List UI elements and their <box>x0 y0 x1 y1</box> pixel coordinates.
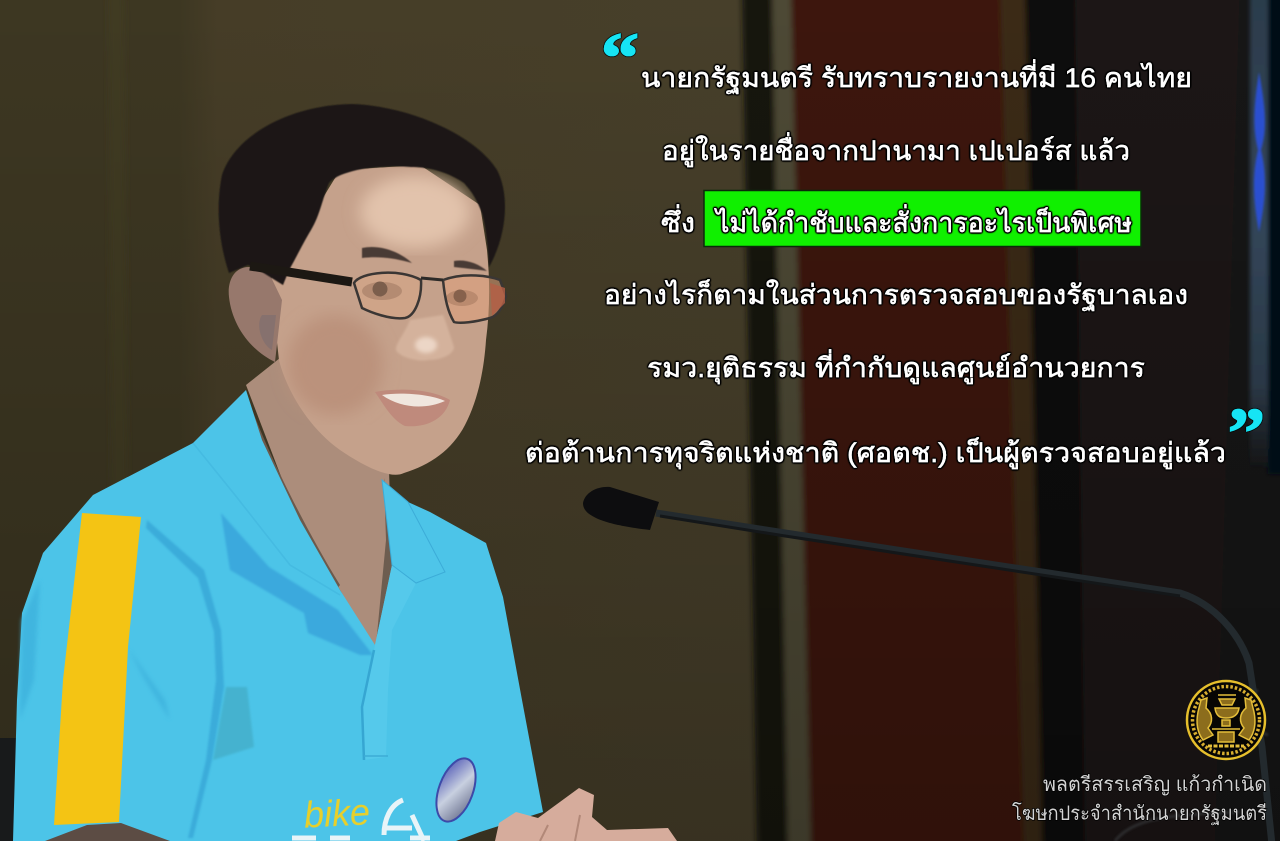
torso shadow <box>213 687 254 760</box>
cheek tint <box>287 315 383 415</box>
quote line 3 lead word: ซึ่ง <box>661 204 695 238</box>
eyes <box>362 282 402 300</box>
blue light strip <box>1250 0 1280 474</box>
quote line 2: อยู่ในรายชื่อจากปานามา เปเปอร์ส แล้ว <box>662 132 1130 167</box>
collar seam left <box>193 443 340 595</box>
polo shirt <box>13 390 543 841</box>
chair <box>0 738 16 841</box>
shirt logo: bike <box>303 791 371 836</box>
opening quote mark: “ <box>601 20 639 97</box>
person: speaker in blue polo shirt <box>0 104 677 841</box>
right collar <box>382 480 445 583</box>
sleeve crease shadows <box>20 580 170 720</box>
credit: spokesperson name: พลตรีสรรเสริญ แก้วกำเนิด <box>1043 774 1267 796</box>
quote line 1: นายกรัฐมนตรี รับทราบรายงานที่มี 16 คนไทย <box>641 59 1192 94</box>
eyebrows <box>362 247 412 263</box>
head skin <box>270 165 489 475</box>
neck shadow <box>376 478 396 645</box>
quote line 6: ต่อต้านการทุจริตแห่งชาติ (ศอตช.) เป็นผู้ตรวจสอบอยู่แล้ว <box>525 435 1226 470</box>
neck <box>246 350 392 650</box>
glasses <box>250 266 506 323</box>
yellow sleeve stripe <box>54 513 141 825</box>
mouth <box>375 390 450 426</box>
sleeve seam shadow <box>146 520 224 838</box>
nose <box>396 315 454 361</box>
quote line 5: รมว.ยุติธรรม ที่กำกับดูแลศูนย์อำนวยการ <box>647 349 1145 385</box>
ear <box>229 267 282 362</box>
placket <box>362 565 416 760</box>
faint cables <box>1115 690 1268 841</box>
green highlight box with text: ไม่ได้กำชับและสั่งการอะไรเป็นพิเศษ <box>714 204 1132 238</box>
icon: government seal <box>1187 681 1265 759</box>
forehead highlight <box>360 176 470 248</box>
hair <box>219 104 505 285</box>
microphone <box>583 487 1272 841</box>
closing quote mark: ” <box>1228 395 1265 472</box>
quote line 4: อย่างไรก็ตามในส่วนการตรวจสอบของรัฐบาลเอง <box>604 277 1188 311</box>
left collar shadow <box>221 513 373 655</box>
badge pin <box>429 753 483 827</box>
hand <box>495 788 677 841</box>
green highlight box with text <box>704 190 1141 246</box>
bare arm <box>45 823 170 841</box>
